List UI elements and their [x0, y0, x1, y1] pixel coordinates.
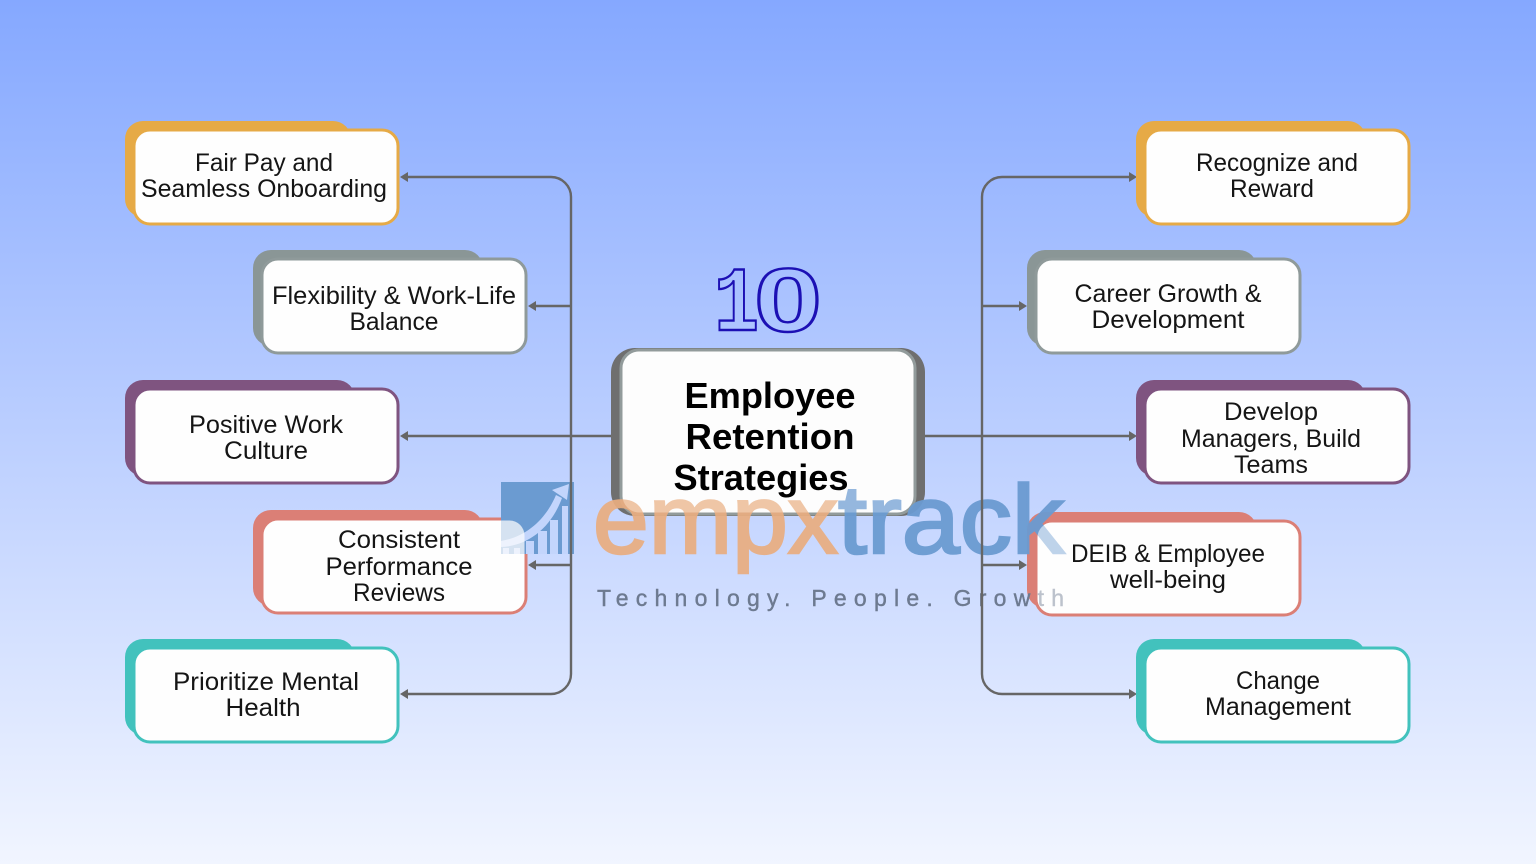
- text: Consistent Performance Reviews: [326, 526, 472, 607]
- card: Positive Work Culture: Positive Work: [189, 411, 344, 439]
- card: Recognize and Reward: [1136, 121, 1409, 224]
- card: Change Management: [1136, 639, 1409, 742]
- card: Career Growth & Development: Career Growth &: [1074, 280, 1262, 308]
- white veils over watermark inside cards: [264, 352, 1298, 614]
- card: Develop Managers, Build Teams: Develop: [1224, 398, 1318, 426]
- heading number: 10: 1: [714, 253, 759, 358]
- title text: Employee: [684, 375, 856, 416]
- left connector lines: [404, 177, 611, 694]
- text: Consistent Performance Reviews: Consistent: [338, 526, 460, 554]
- watermark logo: empxtrack: track: [838, 465, 1065, 574]
- card: Fair Pay and Seamless Onboarding: [125, 121, 398, 224]
- card: Flexibility & Work-Life Balance: Balance: [350, 308, 438, 336]
- left arrowheads: [400, 172, 536, 699]
- card: Career Growth & Development: [1027, 250, 1300, 353]
- card: Fair Pay and Seamless Onboarding: Seamless Onboarding: [141, 175, 387, 203]
- title text: Retention: [686, 416, 854, 457]
- card: Develop Managers, Build Teams: [1136, 380, 1409, 483]
- card: Prioritize Mental Health: Health: [226, 694, 300, 722]
- text: DEIB & Employee well-being: DEIB & Employee: [1071, 540, 1265, 568]
- icon: growth chart: [501, 482, 574, 554]
- card: Flexibility & Work-Life Balance: [253, 250, 526, 353]
- card: Positive Work Culture: Culture: [224, 437, 308, 465]
- panel: central title: [611, 348, 925, 516]
- card: Consistent Performance Reviews: [253, 510, 526, 613]
- card: Prioritize Mental Health: [125, 639, 398, 742]
- card: Career Growth & Development: Development: [1092, 306, 1245, 334]
- card: Change Management: Change: [1236, 667, 1320, 695]
- logo tagline: Technology. People. Growth: [597, 585, 1064, 611]
- title text: Strategies: [674, 457, 848, 498]
- card: Develop Managers, Build Teams: Teams: [1234, 451, 1308, 479]
- right connector lines: [925, 177, 1132, 694]
- heading number: 10: 0: [754, 251, 822, 351]
- card: Positive Work Culture: [125, 380, 398, 483]
- card: Flexibility & Work-Life Balance: Flexibility & Work-Life: [272, 282, 516, 310]
- text: DEIB & Employee well-being: well-being: [1109, 566, 1226, 594]
- title text: [674, 375, 856, 498]
- text: Consistent Performance Reviews: Performance: [326, 553, 472, 581]
- card: Prioritize Mental Health: Prioritize Mental: [173, 668, 359, 696]
- card: Recognize and Reward: Reward: [1230, 175, 1314, 203]
- card: Change Management: Management: [1205, 693, 1351, 721]
- logo wordmark: empx: [593, 465, 838, 574]
- card: Recognize and Reward: Recognize and: [1196, 149, 1358, 177]
- text: Consistent Performance Reviews: Reviews: [353, 579, 445, 607]
- heading number: 10: [714, 251, 822, 358]
- watermark logo: empxtrack: [501, 465, 1065, 611]
- card: Fair Pay and Seamless Onboarding: Fair Pay and: [195, 149, 333, 177]
- text: DEIB & Employee well-being: [1071, 540, 1265, 594]
- right arrowheads: [1019, 172, 1137, 699]
- card: DEIB & Employee well-being: [1027, 512, 1300, 615]
- card: Develop Managers, Build Teams: Managers, Build: [1181, 425, 1361, 453]
